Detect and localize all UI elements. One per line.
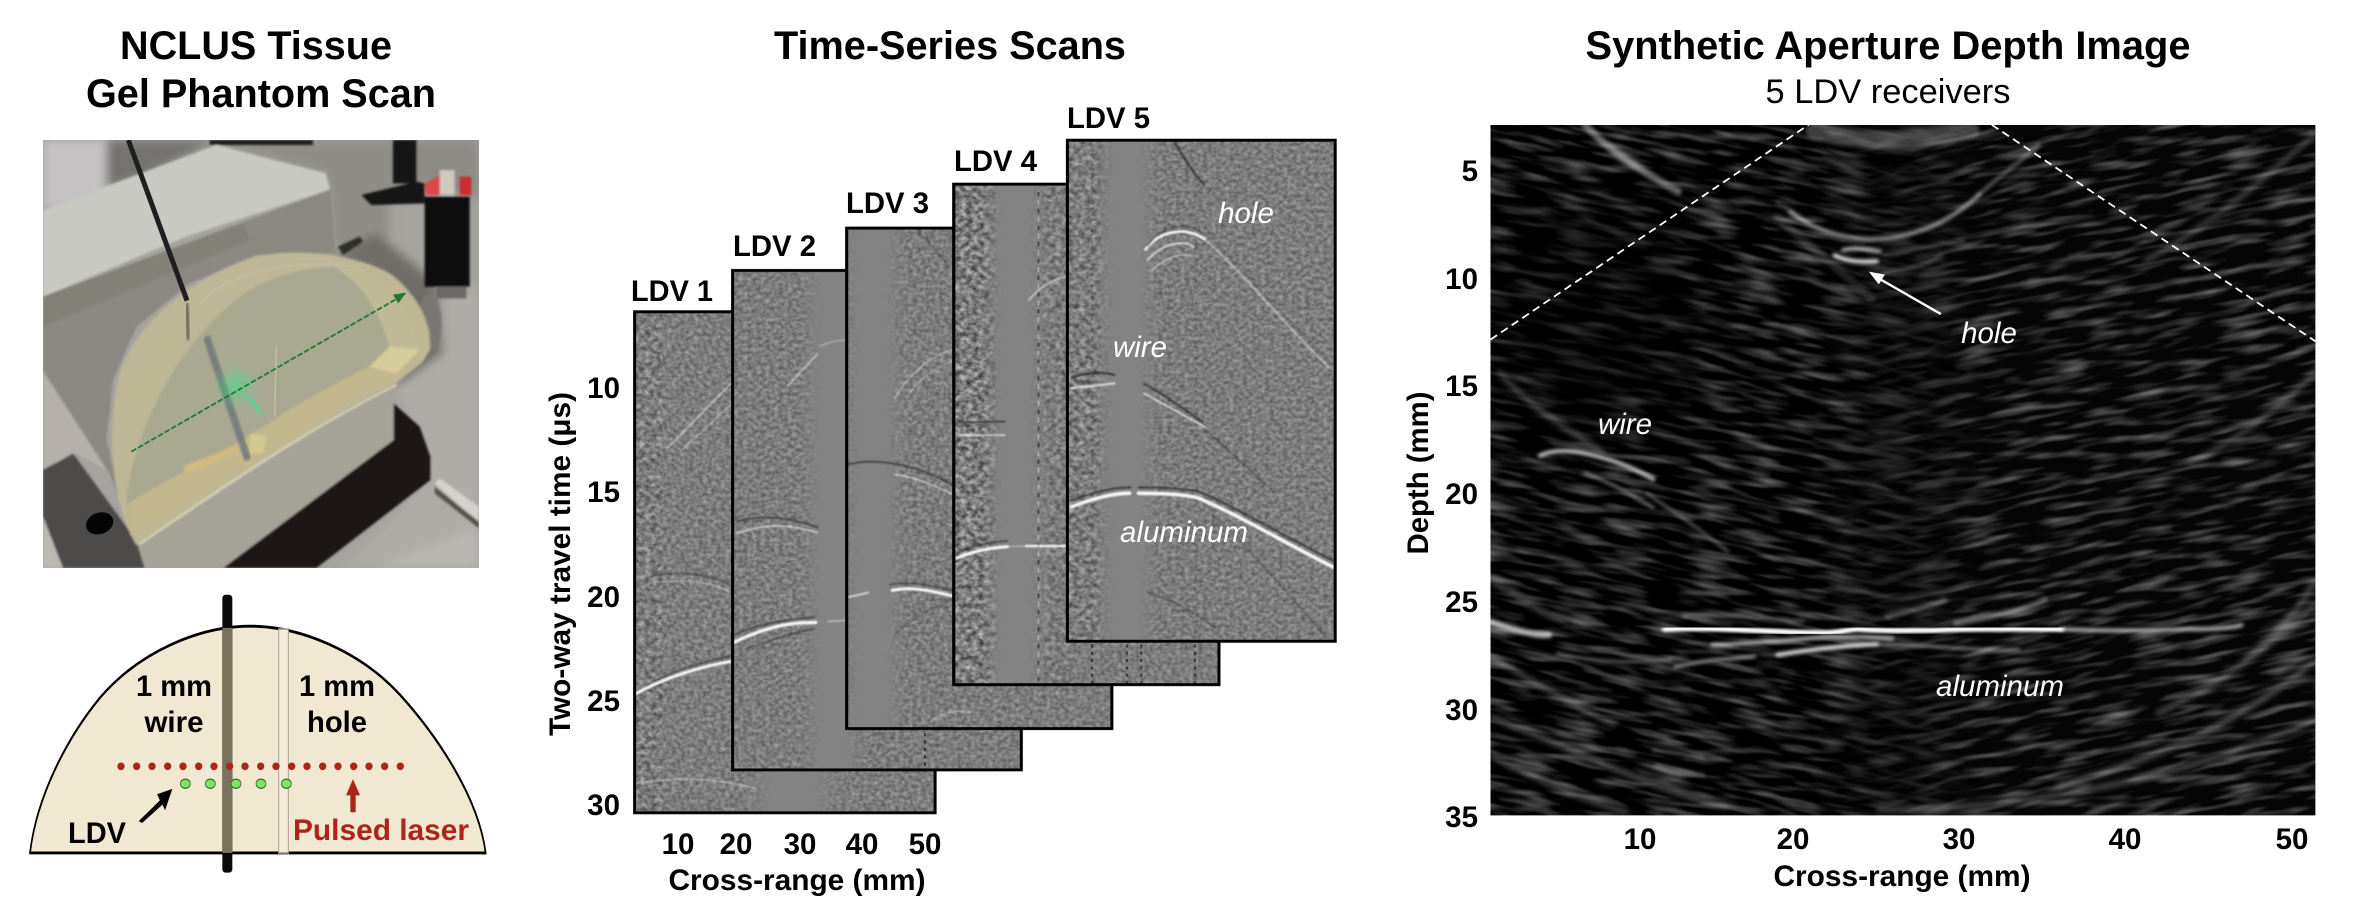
annotation labels on depth image: aluminum xyxy=(1936,670,2064,703)
x axis: cross-range: 40 xyxy=(846,828,878,861)
y axis: two-way travel time xyxy=(544,372,620,822)
scan: LDV 2 xyxy=(733,270,1021,770)
x axis: cross-range: 40 xyxy=(2109,823,2141,856)
title: NCLUS Tissue Gel Phantom Scan xyxy=(86,24,436,116)
y axis: depth: 15 xyxy=(1445,370,1478,403)
diagram: phantom cross-section schematic xyxy=(30,595,486,873)
y axis: depth: 35 xyxy=(1445,801,1478,834)
scan: LDV 4 xyxy=(954,184,1219,712)
y axis: depth: 5 xyxy=(1462,155,1478,188)
schematic labels: 1 mm xyxy=(136,670,212,703)
y axis: depth: 10 xyxy=(1445,263,1478,296)
annotation labels on LDV 5 xyxy=(1113,197,1274,549)
schematic labels: LDV xyxy=(68,817,126,850)
scan labels: LDV 3 xyxy=(846,187,929,220)
title: Synthetic Aperture Depth Image: Synthetic Aperture Depth Image xyxy=(1586,24,2190,68)
schematic labels: wire xyxy=(144,706,204,739)
y axis: two-way travel time: Two-way travel time (μs) xyxy=(544,392,577,736)
schematic labels: hole xyxy=(307,706,367,739)
x axis: cross-range: Cross-range (mm) xyxy=(668,864,926,897)
scan labels: LDV 2 xyxy=(733,230,816,263)
y axis: two-way travel time: 30 xyxy=(587,789,620,822)
scan labels: LDV 4 xyxy=(954,145,1038,178)
1 mm hole xyxy=(279,629,288,853)
arrow: pulsed laser xyxy=(346,779,360,812)
annotation labels on depth image: wire xyxy=(1598,408,1652,441)
annotation labels on depth image xyxy=(1598,317,2064,703)
schematic labels: 1 mm xyxy=(299,670,375,703)
x axis: cross-range: 30 xyxy=(1943,823,1975,856)
y axis: two-way travel time: 15 xyxy=(587,476,620,509)
x axis: cross-range: 30 xyxy=(784,828,816,861)
annotation labels on LDV 5: wire xyxy=(1113,331,1167,364)
y axis: depth: 20 xyxy=(1445,478,1478,511)
x axis: cross-range xyxy=(1624,823,2308,893)
scan: LDV 1 xyxy=(635,312,935,813)
dashed aperture lines xyxy=(1491,125,2315,341)
annotation labels on LDV 5: aluminum xyxy=(1120,516,1248,549)
gel half-dome outline xyxy=(30,626,486,853)
panel: NCLUS tissue gel phantom scan xyxy=(30,24,486,873)
schematic labels xyxy=(68,670,470,850)
title: Synthetic Aperture Depth Image: 5 LDV receivers xyxy=(1766,73,2010,111)
x axis: cross-range: 50 xyxy=(2276,823,2308,856)
annotation labels on LDV 5: hole xyxy=(1218,197,1274,230)
depth image xyxy=(1490,125,2316,816)
1 mm wire xyxy=(222,595,232,873)
x axis: cross-range: 20 xyxy=(1777,823,1809,856)
scan labels: LDV 5 xyxy=(1067,102,1150,135)
scan labels: LDV 1 xyxy=(631,275,713,308)
y axis: two-way travel time: 20 xyxy=(587,581,620,614)
arrow: hole xyxy=(1869,272,1941,314)
y axis: depth: 25 xyxy=(1445,586,1478,619)
scan: LDV 3 xyxy=(836,228,1112,729)
y axis: depth: 30 xyxy=(1445,694,1478,727)
y axis: depth xyxy=(1402,155,1478,834)
scan labels xyxy=(631,102,1150,308)
title: Time-Series Scans: Time-Series Scans xyxy=(774,24,1126,68)
schematic labels: Pulsed laser xyxy=(293,814,470,847)
x axis: cross-range: 10 xyxy=(1624,823,1656,856)
y axis: depth: Depth (mm) xyxy=(1402,392,1435,554)
title: NCLUS Tissue Gel Phantom Scan: NCLUS Tissue xyxy=(120,24,392,68)
LDV receiver positions xyxy=(180,779,291,788)
x axis: cross-range: 10 xyxy=(662,828,694,861)
title: NCLUS Tissue Gel Phantom Scan: Gel Phantom Scan xyxy=(86,72,436,116)
title: Synthetic Aperture Depth Image xyxy=(1586,24,2190,111)
x axis: cross-range xyxy=(662,828,941,897)
pulsed laser positions xyxy=(117,763,404,770)
photo: gel phantom on aluminum block xyxy=(43,140,479,568)
arrow: LDV xyxy=(140,790,171,822)
panel: time-series scans xyxy=(544,24,1335,897)
x axis: cross-range: 50 xyxy=(909,828,941,861)
annotation labels on depth image: hole xyxy=(1961,317,2017,350)
panel: synthetic aperture depth image xyxy=(1402,24,2315,909)
y axis: two-way travel time: 25 xyxy=(587,685,620,718)
x axis: cross-range: Cross-range (mm) xyxy=(1774,860,2030,893)
scan: LDV 5 xyxy=(1067,140,1335,641)
x axis: cross-range: 20 xyxy=(720,828,752,861)
y axis: two-way travel time: 10 xyxy=(587,372,620,405)
